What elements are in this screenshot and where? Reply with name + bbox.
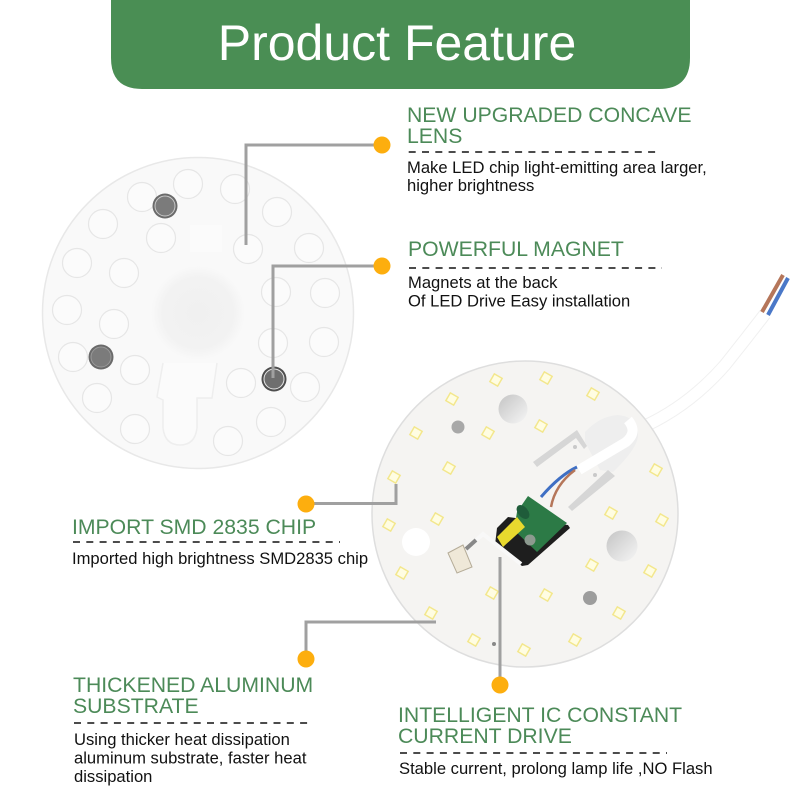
callout: SMD chip [72,484,396,568]
callout: aluminum substrate: SUBSTRATE [73,695,199,718]
callout: concave lens: higher brightness [407,176,534,195]
marker [298,496,314,512]
callout: magnet: Of LED Drive Easy installation [408,292,630,310]
callout: concave lens: LENS [407,125,462,148]
callout: IC drive: CURRENT DRIVE [398,725,572,748]
title banner: Product Feature [218,15,576,71]
leader line [246,145,382,245]
callout: IC drive [398,557,713,778]
heading: INTELLIGENT IC CONSTANT [398,704,682,727]
wires [541,467,577,497]
holes [498,394,528,424]
magnets [88,194,286,392]
heading: NEW UPGRADED CONCAVE [407,104,692,127]
cable slot [585,415,638,472]
title banner [111,0,690,89]
driver module [495,517,570,566]
marker [374,136,390,154]
leader line [273,266,382,378]
callout: magnet [273,238,662,378]
cable loop [579,420,633,470]
heading: THICKENED ALUMINUM [73,674,313,697]
callout: aluminum substrate: dissipation [74,767,152,786]
leader line [498,557,502,685]
callout: aluminum substrate: aluminum substrate, faster heat [74,748,307,768]
leader line [306,484,396,504]
product image: lens disc [42,158,354,468]
description: Imported high brightness SMD2835 chip [72,549,368,568]
description: Magnets at the back [408,273,558,292]
marker [492,676,508,694]
mount clips [573,445,597,477]
description: Make LED chip light-emitting area larger, [407,158,707,177]
description: Stable current, prolong lamp life ,NO Flash [399,759,713,778]
connector moulding [157,363,217,445]
heading: POWERFUL MAGNET [408,238,624,261]
power cable [645,314,765,426]
central hub [151,266,245,360]
connector [448,545,472,573]
marker [298,650,314,668]
heading: IMPORT SMD 2835 CHIP [72,516,316,539]
board [372,361,678,667]
marker [374,258,390,274]
product image: LED board [372,275,788,667]
LEDs [383,372,668,656]
description: Using thicker heat dissipation [74,730,290,749]
callout: concave lens [246,104,707,245]
callout: aluminum substrate [73,622,436,786]
lenses [52,170,340,456]
leader line [306,622,436,659]
